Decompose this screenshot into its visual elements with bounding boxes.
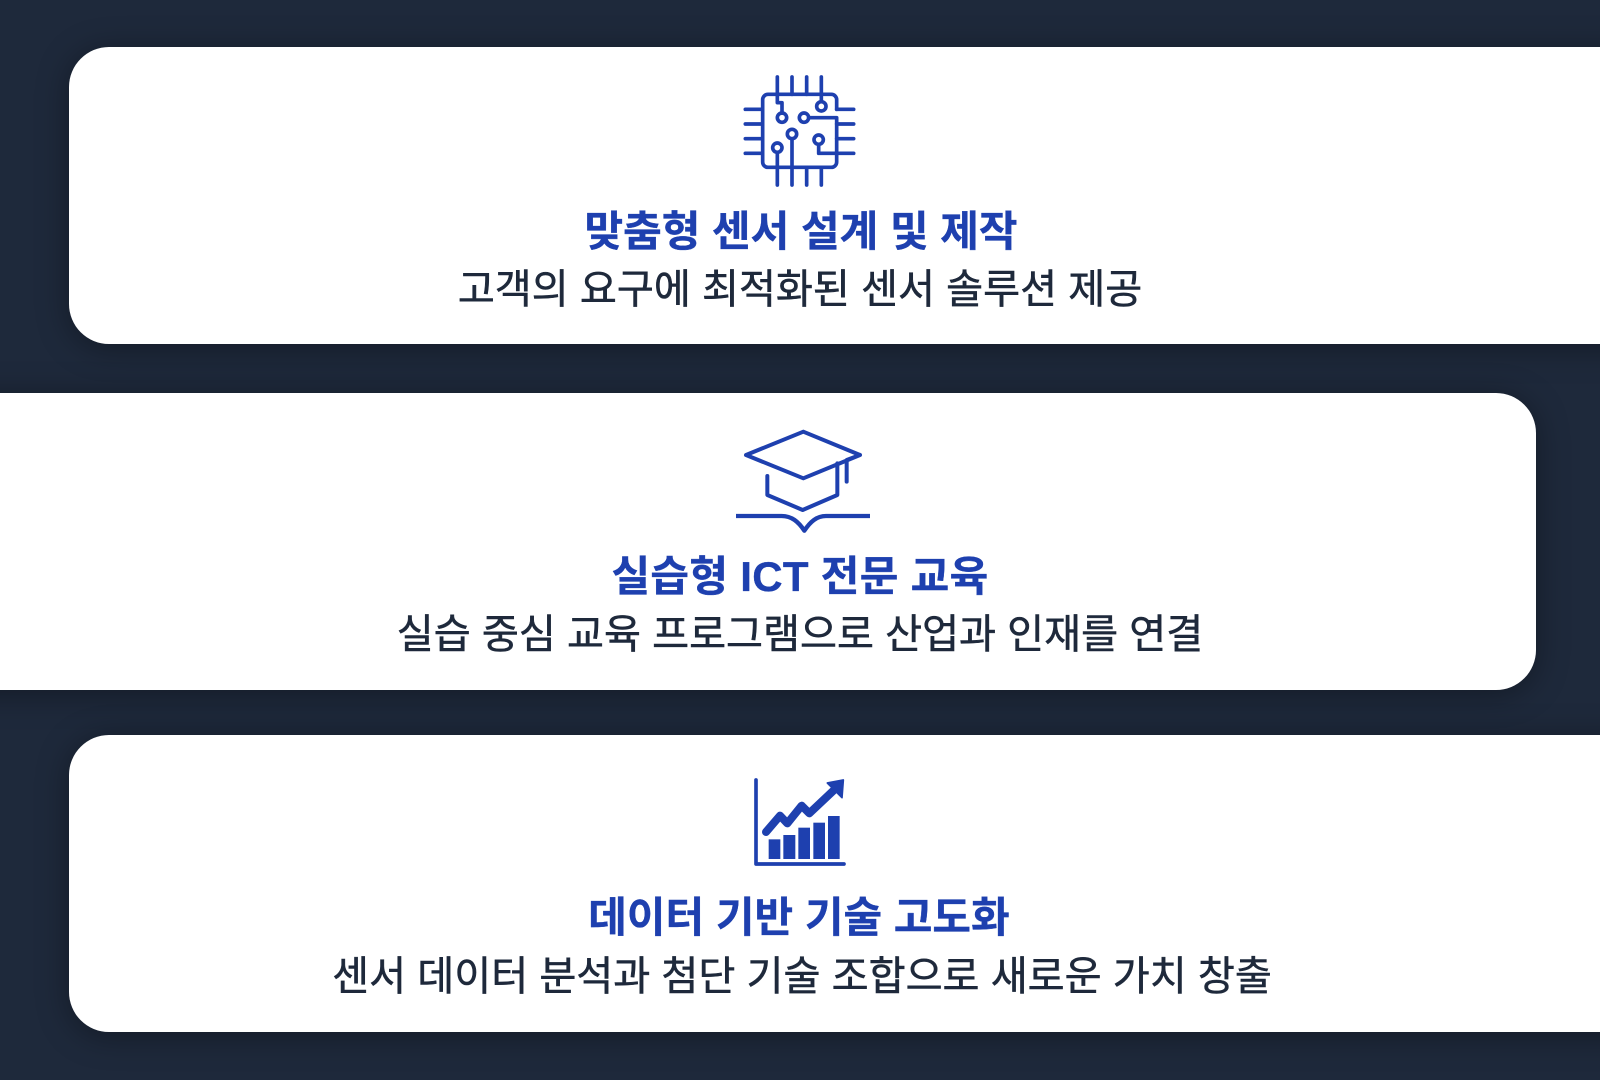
text: ICT education description: 실습 중심 교육 프로그램으로 산업과 인재를 연결	[397, 612, 1203, 657]
icon: circuit chip	[744, 75, 856, 187]
panel: ICT education	[0, 393, 1536, 690]
panel: data technology	[69, 735, 1600, 1032]
panel: custom sensor design	[69, 47, 1600, 344]
heading: custom sensor design: 맞춤형 센서 설계 및 제작	[584, 208, 1018, 255]
text: custom sensor description: 고객의 요구에 최적화된 센서 솔루션 제공	[458, 267, 1142, 312]
text: data technology description: 센서 데이터 분석과 첨단 기술 조합으로 새로운 가치 창출	[332, 954, 1272, 999]
heading: ICT education: 실습형 ICT 전문 교육	[611, 553, 989, 600]
icon: growth chart	[754, 778, 846, 866]
icon: graduation cap on book	[736, 430, 870, 533]
heading: data technology: 데이터 기반 기술 고도화	[588, 894, 1010, 941]
